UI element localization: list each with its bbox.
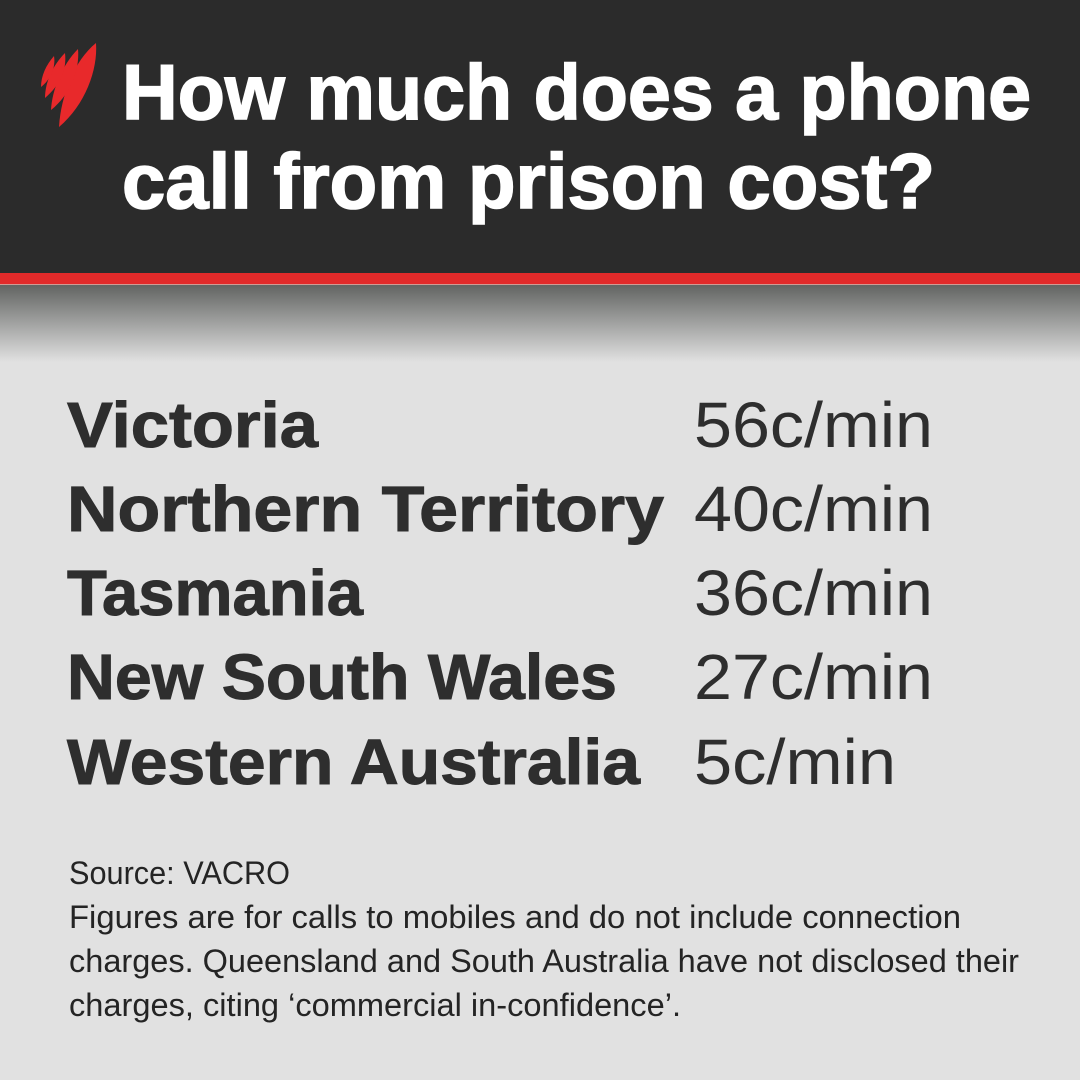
row: New South Wales: New South Wales — [67, 641, 617, 713]
row: Northern Territory: 40c/min — [694, 473, 933, 545]
row: Northern Territory: Northern Territory — [67, 473, 664, 545]
source note: Source: VACRO — [69, 855, 290, 891]
source note: charges, citing ‘commercial in-confidence’. — [69, 987, 681, 1023]
row: Western Australia — [67, 726, 896, 798]
row: Northern Territory — [67, 473, 933, 545]
row: Tasmania: Tasmania — [67, 557, 363, 629]
row: Victoria: Victoria — [67, 389, 318, 461]
row: Western Australia: Western Australia — [67, 726, 640, 798]
source note: charges. Queensland and South Australia have not disclosed their — [69, 943, 1019, 979]
source note — [69, 855, 1019, 1023]
title — [122, 48, 1031, 225]
row: Western Australia: 5c/min — [694, 726, 896, 798]
row: Tasmania: 36c/min — [694, 557, 933, 629]
title: call from prison cost? — [122, 137, 935, 225]
title: How much does a phone — [122, 48, 1031, 136]
row: Victoria: 56c/min — [694, 389, 933, 461]
row: New South Wales: 27c/min — [694, 641, 933, 713]
row: New South Wales — [67, 641, 933, 713]
row: Tasmania — [67, 557, 933, 629]
table: state call costs — [67, 389, 933, 798]
header band — [0, 0, 1080, 285]
icon: red flame logo — [41, 43, 96, 127]
row: Victoria — [67, 389, 933, 461]
source note: Figures are for calls to mobiles and do not include connection — [69, 899, 961, 935]
